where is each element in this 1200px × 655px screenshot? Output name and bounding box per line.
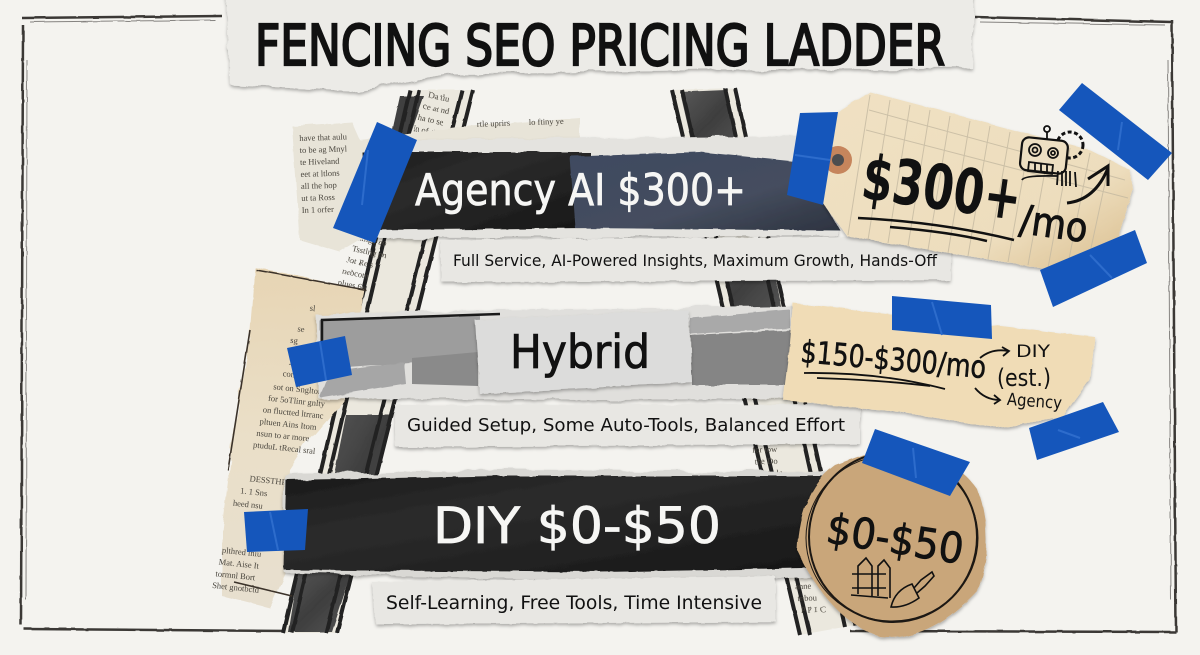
left ladder rail: Tsstlng pn <box>351 243 388 260</box>
eyelet <box>824 146 852 174</box>
left ladder rail <box>283 79 473 633</box>
newspaper scrap behind agency banner: have that aulu <box>299 131 348 143</box>
newspaper scrap behind hybrid and DIY: ptuduL tRecal sral <box>253 439 316 456</box>
tape: DIY circle <box>862 429 970 496</box>
icon: fence <box>851 558 890 598</box>
tape: agency tag top right <box>1059 83 1172 180</box>
tag price: $0-$50 <box>823 504 967 574</box>
banner text: Agency AI $300+ <box>415 165 746 216</box>
price tag: DIY kraft circle <box>797 447 986 637</box>
newspaper scrap behind hybrid and DIY: con. ined <box>282 368 315 381</box>
left ladder rail: nebcotn <box>341 266 371 281</box>
sub-label <box>372 576 776 624</box>
banner text: Hybrid <box>510 325 650 379</box>
newspaper scrap behind hybrid and DIY: pltuen Ains Itom <box>259 416 317 432</box>
right ladder rail <box>672 88 855 635</box>
tape: hybrid tag bottom <box>1029 402 1119 460</box>
right ladder rail: the Do <box>755 456 778 467</box>
Agency label: Agency <box>1006 390 1063 414</box>
tag per month: /mo <box>1017 197 1091 252</box>
newspaper scrap behind hybrid and DIY: nsun to ar more <box>256 428 310 443</box>
arrows and underline <box>804 347 1009 404</box>
left ladder rail: ha to se <box>417 112 445 127</box>
tag price: $150-$300/mo <box>799 334 988 386</box>
newspaper scrap behind hybrid and DIY: sl <box>309 303 317 313</box>
left ladder rail: plues 6e <box>337 277 367 293</box>
DIY label: DIY <box>1016 342 1051 362</box>
newspaper scrap behind hybrid and DIY: Jne Mn <box>289 357 315 369</box>
left ladder rail: ln of tlt <box>413 123 440 138</box>
tag price: $300+ <box>857 141 1026 235</box>
tag grid lines <box>848 95 1128 268</box>
tape: DIY left <box>244 509 308 552</box>
right ladder rail: P P 1 C <box>801 604 827 615</box>
left ladder rail: nlnge oo <box>357 232 388 248</box>
icon: trowel <box>891 572 934 607</box>
left ladder rail: Da tlu <box>428 90 451 104</box>
newspaper scrap behind agency banner: all the hop <box>301 180 337 191</box>
newspaper scrap behind hybrid and DIY: sg <box>290 335 299 346</box>
arrow <box>1067 166 1108 203</box>
newspaper scrap behind agency banner <box>292 116 580 252</box>
newspaper scrap behind agency banner: to be ag Mnyl <box>299 143 348 155</box>
panel: agency banner <box>362 136 952 282</box>
sub-label <box>395 404 860 447</box>
icon: robot and gear <box>1019 126 1083 187</box>
right ladder rail: tnbou <box>797 592 818 603</box>
newspaper scrap behind agency banner: rtle uprirs <box>477 118 510 129</box>
newspaper scrap behind hybrid and DIY <box>212 268 366 608</box>
tape: hybrid left <box>287 336 352 387</box>
sub-label: Self-Learning, Free Tools, Time Intensive <box>386 592 762 614</box>
newspaper scrap behind hybrid and DIY: on fluctted ltrranc <box>262 404 324 421</box>
left ladder rail: ce at nd <box>422 101 451 116</box>
price tag: hybrid <box>783 303 1095 428</box>
newspaper scrap behind hybrid and DIY: heed nsu <box>232 498 264 511</box>
newspaper scrap behind hybrid and DIY: sot on Sngltonmarq <box>273 381 341 398</box>
newspaper scrap behind agency banner: lo ftiny ye <box>529 116 564 127</box>
tape: agency tag left <box>787 112 838 205</box>
est label: (est.) <box>997 364 1051 392</box>
newspaper scrap behind hybrid and DIY: sel on <box>290 345 312 357</box>
newspaper scrap behind agency banner: In 1 orfer <box>302 204 334 215</box>
left ladder rail: Jot Re s <box>346 254 374 270</box>
price underline <box>858 218 1014 241</box>
tape: agency left <box>333 122 417 243</box>
newspaper scrap behind hybrid and DIY: se <box>297 323 305 334</box>
banner text: DIY $0-$50 <box>433 497 721 555</box>
sub-label: Full Service, AI-Powered Insights, Maximum Growth, Hands-Off <box>453 251 938 270</box>
title banner <box>226 0 974 92</box>
right ladder rail: py to le <box>757 468 783 478</box>
right ladder rail: for tow <box>752 444 778 455</box>
sub-label: Guided Setup, Some Auto-Tools, Balanced Effort <box>407 416 845 436</box>
sub-label <box>440 236 952 282</box>
right ladder rail: anne <box>795 581 812 591</box>
tape: agency tag bottom right <box>1040 230 1147 307</box>
newspaper scrap behind hybrid and DIY: plthred lniu <box>222 545 263 559</box>
newspaper scrap behind agency banner: te Hiveland <box>300 156 340 167</box>
tape: hybrid tag top <box>892 296 992 339</box>
newspaper scrap behind hybrid and DIY: Mat. Aise It <box>218 557 260 571</box>
newspaper scrap behind hybrid and DIY: tormnl Bort <box>215 568 256 582</box>
panel: DIY banner <box>284 470 832 624</box>
panel: hybrid banner <box>315 306 860 447</box>
circle outline <box>806 452 978 622</box>
title: FENCING SEO PRICING LADDER <box>255 14 945 79</box>
newspaper scrap behind hybrid and DIY: 1. 1 Sns <box>240 485 268 498</box>
price tag: agency <box>823 92 1133 268</box>
newspaper scrap behind hybrid and DIY: Shet gnotbctd <box>212 580 260 595</box>
newspaper scrap behind agency banner: eet at ltlons <box>300 168 340 179</box>
newspaper scrap behind hybrid and DIY: for 5oTlinr gnlty <box>268 393 326 409</box>
newspaper scrap behind hybrid and DIY: DESSTHR <box>249 473 288 487</box>
newspaper scrap behind agency banner: ut ta Ross <box>301 192 335 203</box>
